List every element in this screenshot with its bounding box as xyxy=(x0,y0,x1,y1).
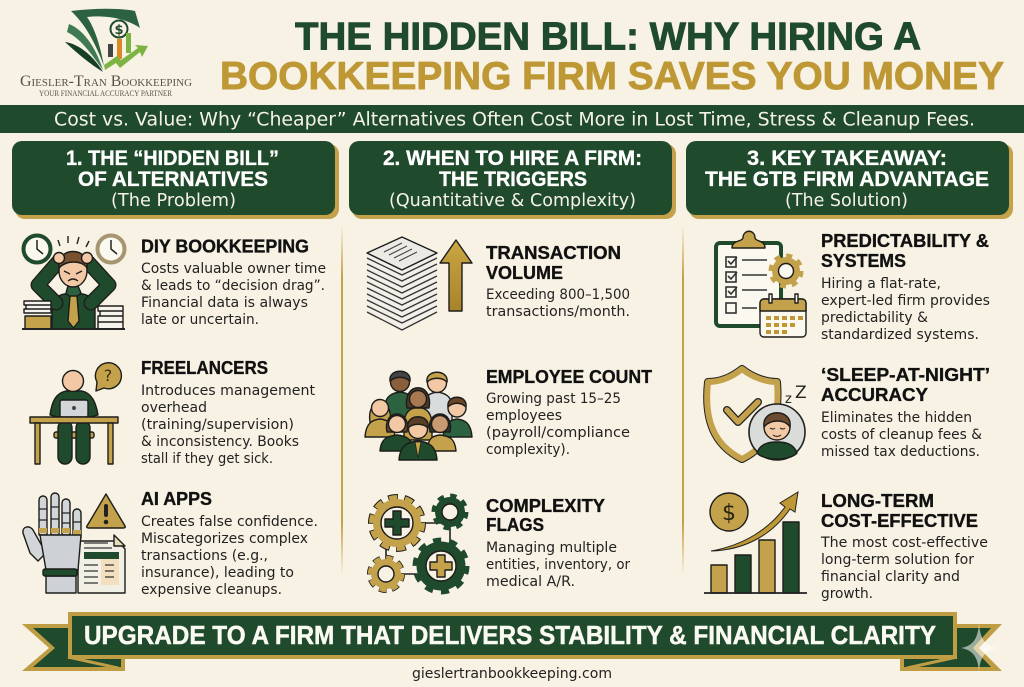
sleep-at-night text xyxy=(821,365,990,460)
long-term text: long-term solution for xyxy=(821,551,974,568)
transaction volume text: transactions/month. xyxy=(486,303,630,320)
column 3 heading xyxy=(686,141,1013,219)
icon: robot hand and warning xyxy=(23,493,125,593)
long-term text: financial clarity and xyxy=(821,568,960,585)
column 1 heading xyxy=(12,141,339,219)
icon: shield with sleeping person: z xyxy=(785,392,792,407)
AI apps text: Creates false confidence. xyxy=(141,513,318,530)
predictability text: SYSTEMS xyxy=(821,251,906,271)
subtitle bar xyxy=(0,105,1024,133)
logo: Giesler-Tran Bookkeeping: $ xyxy=(114,23,124,38)
banner xyxy=(22,612,1002,672)
column 1 heading: OF ALTERNATIVES xyxy=(78,168,268,191)
column 3 heading: THE GTB FIRM ADVANTAGE xyxy=(705,168,989,191)
DIY bookkeeping text: Financial data is always xyxy=(141,294,308,311)
sleep-at-night text: missed tax deductions. xyxy=(821,443,980,460)
long-term text: COST-EFFECTIVE xyxy=(821,511,978,531)
long-term text: growth. xyxy=(821,585,873,602)
transaction volume text: VOLUME xyxy=(486,263,563,283)
employee count text xyxy=(486,367,652,458)
freelancers text xyxy=(141,358,315,467)
column 3 heading: 3. KEY TAKEAWAY: xyxy=(747,147,947,170)
icon: freelancer at desk: ? xyxy=(104,366,112,385)
AI apps text: AI APPS xyxy=(141,489,212,509)
DIY bookkeeping text: Costs valuable owner time xyxy=(141,260,326,277)
DIY bookkeeping text: DIY BOOKKEEPING xyxy=(141,236,309,256)
predictability text xyxy=(821,231,990,343)
icon: freelancer at desk xyxy=(30,363,121,464)
AI apps text: Miscategorizes complex xyxy=(141,530,308,547)
freelancers text: FREELANCERS xyxy=(141,358,268,378)
predictability text: Hiring a flat-rate, xyxy=(821,275,941,292)
employee count text: (payroll/compliance xyxy=(486,424,630,441)
sleep-at-night text: ACCURACY xyxy=(821,385,928,405)
column 1 heading: 1. THE “HIDDEN BILL” xyxy=(66,147,279,170)
freelancers text: & inconsistency. Books xyxy=(141,433,299,450)
column 1 heading: (The Problem) xyxy=(111,190,236,211)
column 2 heading: 2. WHEN TO HIRE A FIRM: xyxy=(383,147,642,170)
complexity flags text: Managing multiple xyxy=(486,539,617,556)
AI apps text xyxy=(141,489,318,598)
long-term text: The most cost-effective xyxy=(820,534,988,551)
employee count text: Growing past 15–25 xyxy=(486,390,621,407)
complexity flags text xyxy=(486,496,630,590)
AI apps text: transactions (e.g., xyxy=(141,547,268,564)
column 3 heading: (The Solution) xyxy=(785,190,908,211)
freelancers text: Introduces management xyxy=(141,382,315,399)
employee count text: employees xyxy=(486,407,562,424)
predictability text: PREDICTABILITY & xyxy=(821,231,989,251)
freelancers text: (training/supervision) xyxy=(141,416,294,433)
banner: UPGRADE TO A FIRM THAT DELIVERS STABILITY & FINANCIAL CLARITY xyxy=(84,620,936,650)
logo name: Giesler-Tran Bookkeeping xyxy=(20,73,192,90)
predictability text: standardized systems. xyxy=(821,326,979,343)
icon: paper stack and up arrow xyxy=(367,237,472,330)
long-term text xyxy=(820,491,988,602)
DIY bookkeeping text: late or uncertain. xyxy=(141,311,259,328)
sleep-at-night text: costs of cleanup fees & xyxy=(821,426,982,443)
freelancers text: overhead xyxy=(141,399,207,416)
DIY bookkeeping text xyxy=(141,236,326,328)
panel: column 2 xyxy=(349,141,676,591)
title: BOOKKEEPING FIRM SAVES YOU MONEY xyxy=(220,55,1004,98)
complexity flags text: entities, inventory, or xyxy=(486,556,630,573)
employee count text: complexity). xyxy=(486,441,570,458)
complexity flags text: medical A/R. xyxy=(486,573,575,590)
AI apps text: expensive cleanups. xyxy=(141,581,282,598)
subtitle bar: Cost vs. Value: Why “Cheaper” Alternatives Often Cost More in Lost Time, Stress & Cleanup Fees. xyxy=(54,110,975,130)
icon: employee group xyxy=(365,371,472,460)
transaction volume text xyxy=(486,243,630,320)
sleep-at-night text: ‘SLEEP-AT-NIGHT’ xyxy=(821,365,990,385)
title: THE HIDDEN BILL: WHY HIRING A xyxy=(295,16,921,58)
employee count text: EMPLOYEE COUNT xyxy=(486,367,652,387)
column 2 heading xyxy=(349,141,676,219)
DIY bookkeeping text: & leads to “decision drag”. xyxy=(141,277,325,294)
icon: stressed owner xyxy=(22,236,125,329)
column 2 heading: (Quantitative & Complexity) xyxy=(389,190,636,211)
icon: checklist, gear and calendar xyxy=(716,231,806,337)
icon: growth chart with coin: $ xyxy=(722,501,736,526)
complexity flags text: FLAGS xyxy=(486,515,544,535)
icon: growth chart with coin xyxy=(704,492,807,593)
icon: connected gears xyxy=(370,496,466,591)
column 2 heading: THE TRIGGERS xyxy=(439,168,587,191)
freelancers text: stall if they get sick. xyxy=(141,450,273,467)
complexity flags text: COMPLEXITY xyxy=(486,496,605,516)
panel: column 1 xyxy=(12,141,339,598)
title xyxy=(220,16,1004,98)
icon: shield with sleeping person xyxy=(707,369,807,460)
logo: Giesler-Tran Bookkeeping xyxy=(20,9,192,98)
transaction volume text: TRANSACTION xyxy=(486,243,621,263)
icon: shield with sleeping person: Z xyxy=(795,383,807,403)
AI apps text: insurance), leading to xyxy=(141,564,294,581)
website url: gieslertranbookkeeping.com xyxy=(412,666,612,682)
long-term text: LONG-TERM xyxy=(821,491,934,511)
sleep-at-night text: Eliminates the hidden xyxy=(821,409,972,426)
predictability text: expert-led firm provides xyxy=(821,292,990,309)
logo tagline: YOUR FINANCIAL ACCURACY PARTNER xyxy=(39,89,173,98)
panel: column 3 xyxy=(686,141,1013,602)
transaction volume text: Exceeding 800–1,500 xyxy=(486,286,630,303)
predictability text: predictability & xyxy=(821,309,928,326)
